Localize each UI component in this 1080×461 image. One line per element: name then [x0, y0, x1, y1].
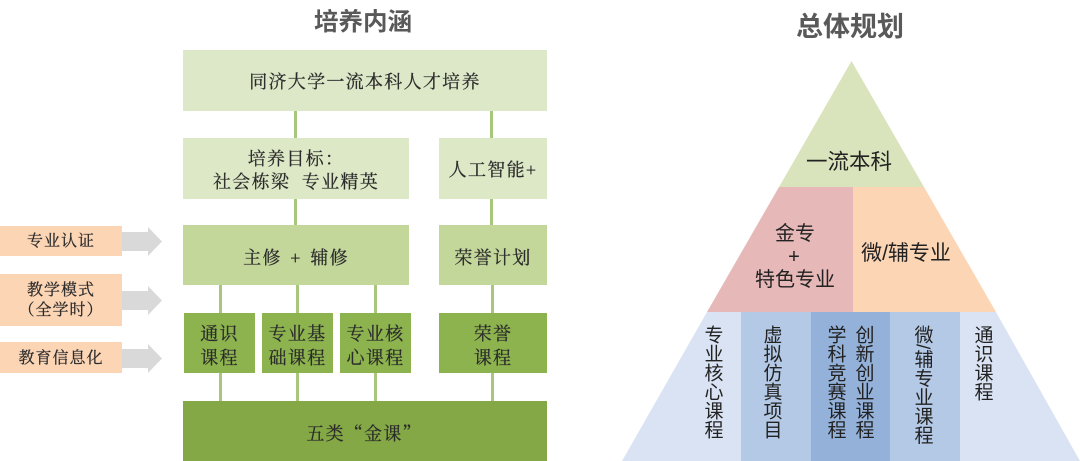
heading: 总体规划: 总体规划	[796, 12, 904, 42]
box: 专业核心课程	[340, 313, 411, 373]
pyramid bottom column: 虚拟仿真项目: 虚拟仿真项目	[760, 325, 782, 439]
box: 荣誉计划: 荣誉计划	[454, 248, 532, 268]
box: 培养目标: 社会栋梁 专业精英	[213, 172, 379, 192]
pyramid middle: 金专+特色专业	[707, 187, 853, 312]
pyramid top: 一流本科	[779, 61, 924, 187]
label: 教育信息化: 教育信息化	[18, 350, 104, 366]
box: 专业核心课程: 专业核	[347, 324, 404, 344]
label: 教育信息化	[0, 342, 122, 373]
pyramid middle: 金专+特色专业: +	[788, 246, 800, 268]
arrow: 教学模式	[122, 286, 162, 315]
pyramid bottom column: 通识课程	[960, 312, 1080, 461]
pyramid bottom column: 学科竞赛 创新创业课程: 创新创业课程	[852, 325, 874, 439]
box: 通识课程: 通识	[200, 324, 239, 344]
box: 主修 + 辅修: 主修 + 辅修	[243, 248, 349, 268]
label: 教学模式（全学时）: （全学时）	[18, 302, 104, 319]
pyramid bottom column: 通识课程: 通识课程	[972, 325, 993, 401]
box: 通识课程	[184, 313, 255, 373]
box: 专业基础课程: 专业基	[269, 324, 326, 344]
box: 专业基础课程: 础课程	[269, 348, 326, 368]
box: 人工智能+: 人工智能+	[449, 160, 537, 180]
box: 五类金课	[183, 401, 547, 461]
pyramid bottom column: 学科竞赛 创新创业课程: 学科竞赛课程	[824, 325, 846, 439]
box: 培养目标	[183, 138, 409, 199]
box: 培养目标: 培养目标：	[248, 148, 344, 168]
heading: 培养内涵: 培养内涵	[314, 9, 412, 36]
box: 专业核心课程: 心课程	[347, 348, 404, 368]
pyramid middle: 微/辅专业	[853, 187, 996, 312]
box: 人工智能+	[439, 138, 547, 199]
pyramid middle: 金专+特色专业: 金专	[775, 222, 815, 245]
box: 五类金课: 五类“金课”	[306, 420, 422, 446]
pyramid bottom column: 专业核心课程: 专业核心课程	[702, 325, 723, 439]
pyramid bottom column: 虚拟仿真项目	[741, 312, 811, 461]
box: 荣誉课程: 荣誉	[474, 324, 512, 344]
box: 通识课程: 课程	[200, 348, 239, 368]
pyramid bottom column: 学科竞赛 创新创业课程	[811, 312, 890, 461]
label: 专业认证	[0, 226, 122, 256]
box: 同济大学一流本科人才培养	[183, 50, 547, 111]
box: 主修 + 辅修	[183, 225, 409, 285]
pyramid middle: 微/辅专业: 微/辅专业	[861, 242, 951, 265]
pyramid bottom column: 专业核心课程	[622, 312, 741, 461]
arrow: 教育信息化	[122, 344, 162, 373]
pyramid bottom column: 微/辅专业课程	[890, 312, 960, 461]
box: 同济大学一流本科人才培养: 同济大学一流本科人才培养	[249, 72, 481, 92]
pyramid middle: 金专+特色专业: 特色专业	[755, 268, 835, 291]
label: 教学模式（全学时）: 教学模式	[27, 282, 95, 299]
arrow: 专业认证	[122, 227, 162, 256]
label: 教学模式（全学时）	[0, 274, 122, 326]
pyramid top: 一流本科: 一流本科	[806, 150, 892, 174]
box: 荣誉课程	[439, 313, 547, 373]
box: 荣誉课程: 课程	[474, 348, 512, 368]
label: 专业认证: 专业认证	[27, 232, 95, 250]
pyramid bottom column: 微/辅专业课程: 微/辅专业课程	[912, 325, 933, 444]
box: 专业基础课程	[262, 313, 333, 373]
box: 荣誉计划	[439, 225, 547, 285]
